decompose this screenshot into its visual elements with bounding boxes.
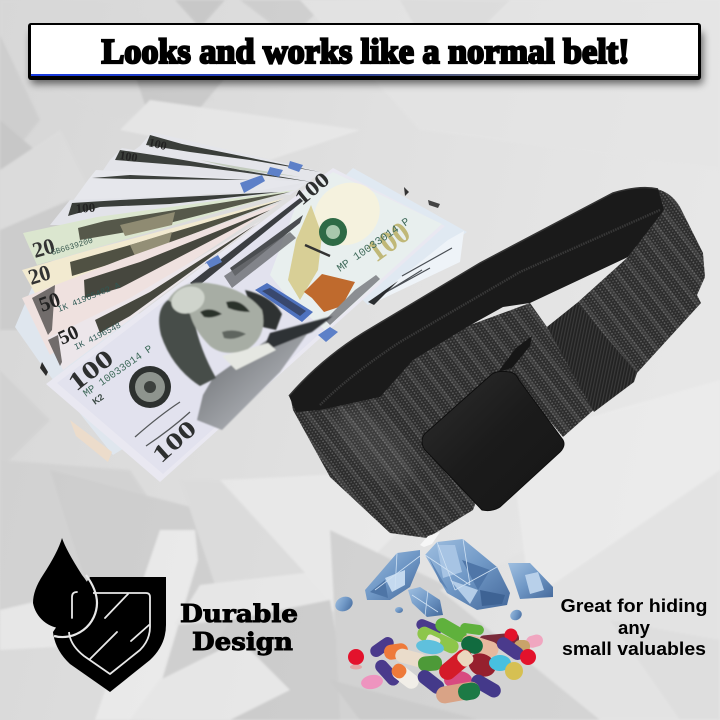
top 100 bills (50, 132, 322, 225)
inner lining with zipper (289, 188, 664, 412)
green seal (319, 218, 347, 246)
top 100 bills: 100 (147, 135, 168, 153)
treasury seal (129, 366, 171, 408)
coat (197, 320, 317, 430)
heading: durable design: Design (192, 627, 293, 656)
signatures (135, 402, 190, 446)
title text: Looks and works like a normal belt! (102, 32, 630, 71)
top 100 bills: 100 (119, 148, 138, 165)
hair (159, 288, 216, 386)
bills behind left (15, 250, 170, 462)
cash fan (15, 132, 708, 705)
district code: K2 (90, 392, 106, 407)
heading: durable design (180, 599, 298, 656)
caption: great for hiding: small valuables (562, 639, 706, 659)
diamonds (333, 532, 553, 622)
front 100 dollar bill: 100 (290, 167, 334, 210)
dark edge bands (190, 198, 303, 288)
face (168, 283, 263, 353)
50 dollar bills: IK 4196548 (73, 321, 123, 353)
20 dollar bills: 20 (25, 259, 54, 290)
dense slider loop (547, 303, 637, 412)
left diamond (365, 550, 420, 600)
portrait of Franklin (159, 282, 333, 430)
caption: great for hiding: Great for hiding (560, 596, 708, 616)
tiny diamonds (333, 594, 524, 622)
50 dollar bills: 50 (55, 321, 82, 350)
pills (348, 615, 544, 705)
orange patch (304, 274, 355, 312)
heading: durable design: Durable (180, 599, 298, 628)
50 dollar bills: 50 (36, 287, 63, 317)
front 100 dollar bill (46, 167, 445, 482)
icon: water drop and shield (33, 538, 166, 692)
gold 100 numeral: 100 (361, 216, 417, 269)
top 100 bills: 100 (75, 200, 96, 216)
highlight under belt (420, 532, 440, 547)
numeral 100 lower left: 100 (63, 345, 119, 397)
20 dollar bills: 20 (29, 233, 58, 263)
right diamond (508, 563, 553, 599)
title banner (28, 23, 703, 84)
50 dollar bills (22, 203, 280, 370)
webbing silhouette (290, 189, 705, 538)
50 dollar bills: IK 41965482 A (56, 280, 122, 315)
webbing highlight (324, 394, 426, 496)
plastic slider (498, 336, 532, 372)
buckle (422, 371, 564, 511)
caption: great for hiding: any (618, 618, 650, 638)
right half of note (270, 172, 442, 330)
serial left: MP 10033014 P (81, 343, 155, 400)
bills behind right (290, 168, 467, 305)
belt (289, 188, 705, 538)
watermark window (302, 170, 392, 258)
20 dollar bills (22, 190, 295, 295)
serial right: MP 10033014 P (335, 216, 413, 275)
blue ribbon (255, 283, 313, 322)
caption: great for hiding (560, 596, 708, 659)
large diamond (425, 539, 510, 610)
20 dollar bills: GB6639200 (50, 237, 94, 258)
centre small diamond (408, 587, 443, 617)
numeral 100 bottom: 100 (148, 416, 202, 468)
